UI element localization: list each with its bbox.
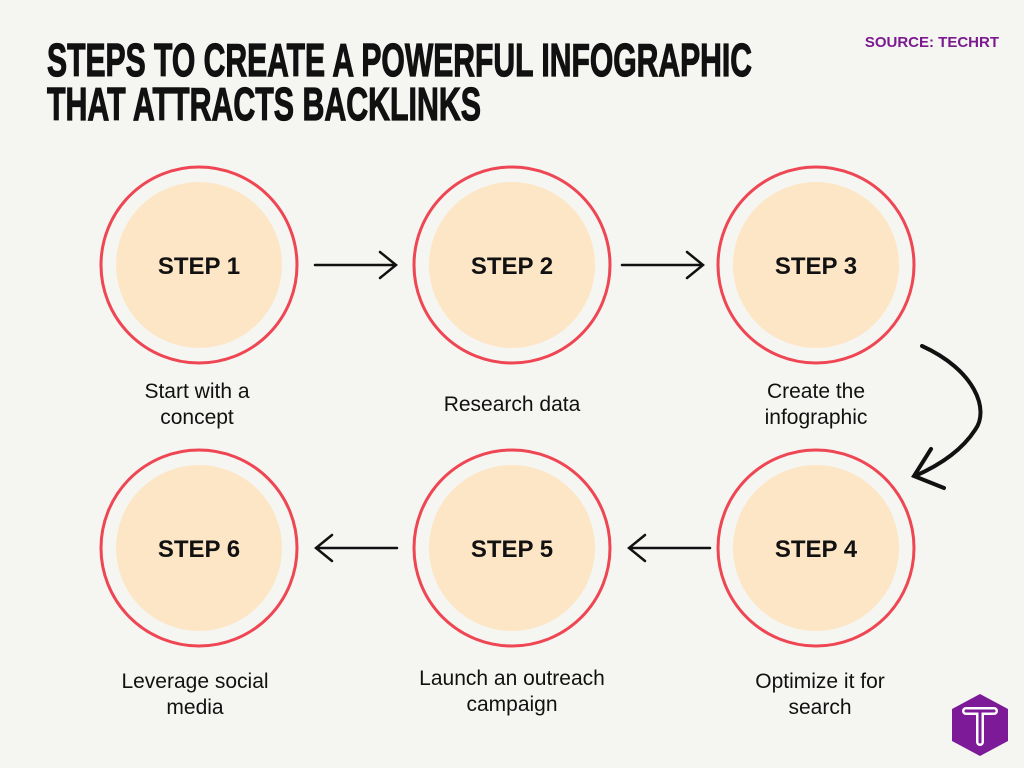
step 3: STEP 3 [775,253,857,280]
descriptions: Optimize it for [755,670,885,693]
descriptions: Leverage social [121,670,269,693]
descriptions: infographic [765,406,867,429]
descriptions: campaign [466,693,558,716]
step 1 [101,167,297,363]
step 4 [718,450,914,646]
title [47,34,752,130]
descriptions [121,380,885,719]
logo [952,694,1008,756]
step 6 [101,450,297,646]
descriptions: Research data [444,393,581,416]
descriptions: Create the [767,380,865,403]
curved arrow [914,346,981,488]
step 5: STEP 5 [471,536,553,563]
step 4: STEP 4 [775,536,858,563]
descriptions: search [788,696,852,719]
step 3 [718,167,914,363]
title: THAT ATTRACTS BACKLINKS [47,78,481,130]
descriptions: concept [160,406,234,429]
descriptions: Start with a [144,380,250,403]
step 5 [414,450,610,646]
descriptions: media [166,696,224,719]
source label: SOURCE: TECHRT [865,34,999,51]
step 2: STEP 2 [471,253,553,280]
arrows [315,252,710,561]
step 2 [414,167,610,363]
step 1: STEP 1 [158,253,240,280]
step 6: STEP 6 [158,536,240,563]
descriptions: Launch an outreach [419,667,605,690]
